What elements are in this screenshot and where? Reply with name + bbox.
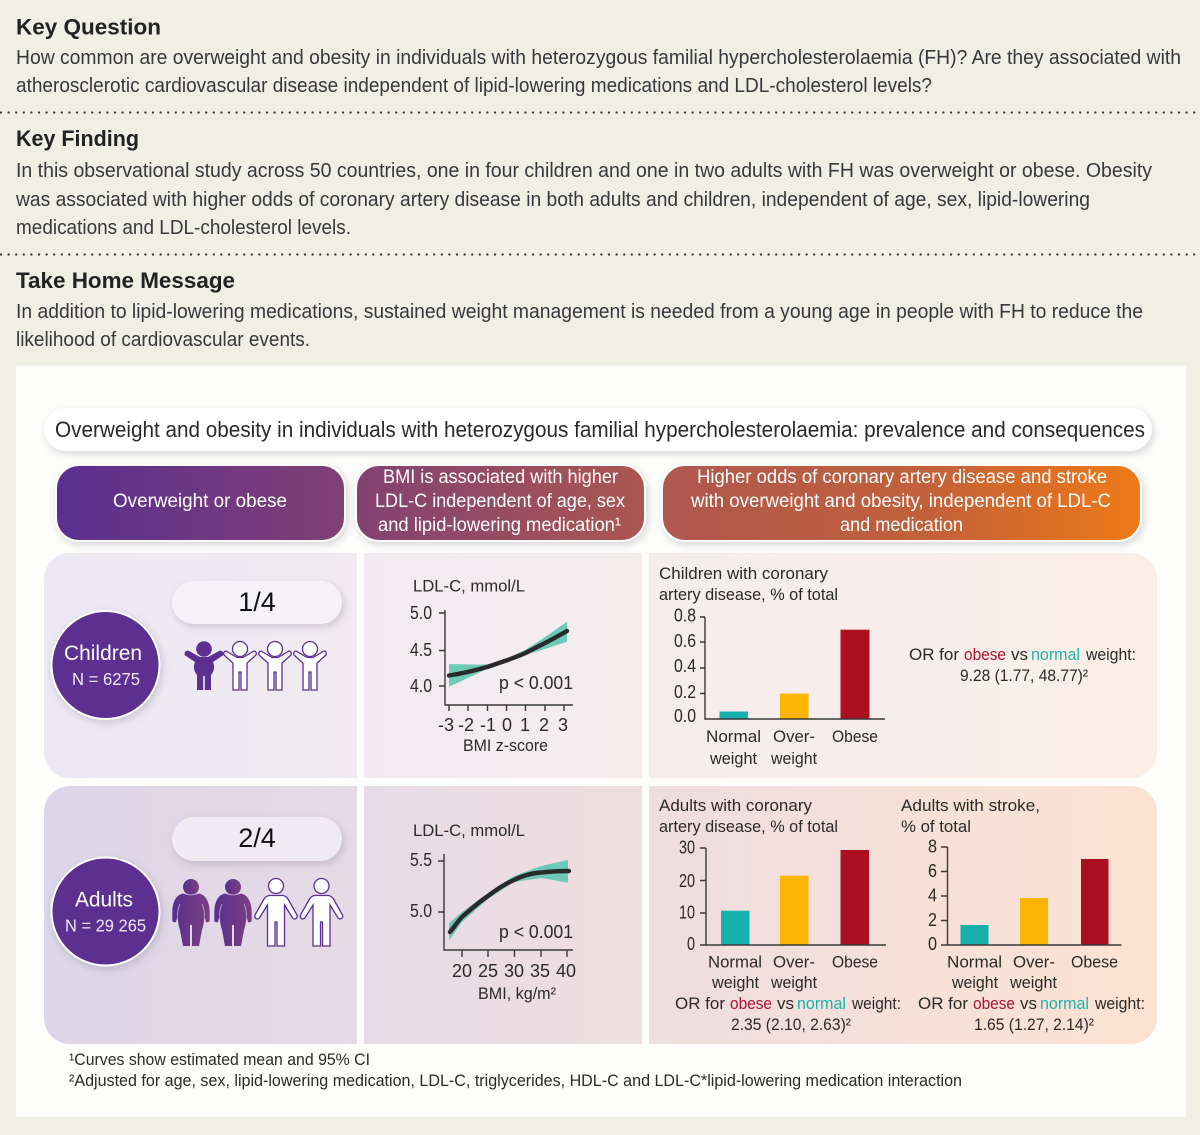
category labels: Normal [947, 952, 1002, 972]
odds ratio: adults coronary artery disease [675, 994, 901, 1034]
category labels [706, 727, 878, 768]
axes [439, 610, 573, 711]
x axis labels: -2 [458, 715, 474, 735]
y axis labels [928, 836, 937, 954]
icon: normal weight child 3 [294, 642, 326, 690]
column header: overweight or obese [56, 465, 345, 541]
icon: normal weight adult 1 [255, 878, 297, 946]
y axis labels: 8 [928, 836, 937, 856]
y axis labels: 10 [679, 902, 695, 922]
odds ratio: adults stroke: normal [1040, 994, 1089, 1013]
x axis title: BMI, kg/m² [478, 984, 556, 1003]
section: key finding [15, 126, 1152, 239]
x axis labels: 30 [504, 961, 524, 981]
chart title [901, 796, 1040, 836]
x axis labels [438, 715, 568, 735]
x axis labels: 1 [520, 715, 530, 735]
column header: BMI and LDL-C [356, 465, 645, 541]
y axis labels: 0.4 [674, 656, 696, 676]
children fraction pill: 1/4 [238, 587, 276, 617]
x axis labels: 2 [539, 715, 549, 735]
category labels: Over- [1013, 952, 1055, 972]
y axis labels: 20 [679, 871, 695, 891]
x axis title: BMI z-score [463, 736, 548, 755]
y axis labels: 5.5 [410, 850, 432, 870]
y axis labels: 0 [687, 934, 695, 954]
y axis labels: 0.6 [674, 631, 696, 651]
y axis labels: 4.5 [410, 640, 432, 660]
category labels: weight [770, 973, 817, 992]
y axis labels: 5.0 [410, 603, 432, 623]
odds ratio: children: 9.28 (1.77, 48.77)² [960, 666, 1088, 685]
category labels: Over- [773, 952, 815, 972]
y axis labels: 4.0 [410, 676, 432, 696]
p value: p < 0.001 [499, 922, 573, 942]
x axis labels: 35 [530, 961, 550, 981]
y axis labels [410, 603, 432, 696]
category labels: Normal [706, 727, 761, 746]
odds ratio: adults coronary artery disease: 2.35 (2.10, 2.63)² [731, 1015, 851, 1034]
icon: normal weight adult 2 [300, 878, 343, 946]
category labels: weight [770, 749, 817, 768]
column header: BMI and LDL-C: and lipid-lowering medication¹ [378, 514, 621, 536]
icon: obese adult 2 [214, 879, 252, 946]
category labels: Obese [832, 952, 878, 972]
confidence band [449, 860, 568, 941]
heading: take home message: Take Home Message [16, 268, 235, 293]
y axis labels [674, 606, 696, 726]
chart title: LDL-C, mmol/L [413, 576, 525, 596]
chart title: Children with coronary [659, 564, 828, 583]
column header: BMI and LDL-C: LDL-C independent of age, sex [375, 490, 625, 512]
icon: overweight child [184, 641, 224, 690]
odds ratio: adults stroke: weight: [1094, 994, 1145, 1013]
axes [941, 847, 1122, 945]
axes [438, 854, 573, 957]
column header: coronary artery disease and stroke: with overweight and obesity, independent of LDL-C [690, 490, 1111, 512]
y axis labels: 0.8 [674, 606, 696, 626]
bars [720, 630, 870, 719]
text: key finding line 2: was associated with higher odds of coronary artery disease in both adults and children, independent of age, sex, lipid-lowering [15, 189, 1090, 211]
text: key finding line 3: medications and LDL-cholesterol levels. [16, 217, 351, 239]
title pill [44, 408, 1152, 451]
text: take home line 2: likelihood of cardiovascular events. [16, 329, 310, 351]
x axis labels: 20 [452, 961, 472, 981]
panel: children coronary artery disease chart [649, 553, 1157, 778]
section: key question [16, 14, 1181, 97]
category labels: weight [709, 749, 757, 768]
icon: obese adult 1 [172, 879, 210, 946]
y axis labels: 30 [679, 838, 695, 858]
odds ratio: adults stroke: 1.65 (1.27, 2.14)² [974, 1015, 1094, 1034]
category labels: Obese [1071, 952, 1118, 972]
category labels: Normal [708, 952, 762, 972]
title pill: Overweight and obesity in individuals with heterozygous familial hypercholesterolaemia: prevalence and consequences [55, 417, 1145, 442]
text: key question line 1: How common are overweight and obesity in individuals with heterozygous familial hypercholesterolaemia (FH)? Are they associated with [16, 47, 1181, 69]
x axis labels: 0 [502, 715, 512, 735]
column header: coronary artery disease and stroke [662, 465, 1141, 541]
y axis labels: 0 [928, 934, 937, 954]
section: take home message [16, 268, 1143, 351]
children circle: Children [64, 642, 142, 665]
x axis labels [452, 961, 576, 981]
children fraction pill [172, 581, 342, 624]
text: take home line 1: In addition to lipid-lowering medications, sustained weight management is needed from a young age in people with FH to reduce the [16, 301, 1143, 323]
p value: p < 0.001 [499, 673, 573, 693]
category labels [947, 952, 1118, 992]
chart title: LDL-C, mmol/L [413, 821, 525, 840]
axes [700, 848, 886, 945]
category labels: weight [951, 973, 998, 992]
odds ratio: adults stroke [918, 994, 1145, 1034]
column header: overweight or obese: Overweight or obese [113, 490, 287, 512]
chart title: % of total [901, 817, 971, 836]
odds ratio: adults stroke: OR for [918, 994, 968, 1013]
chart title: artery disease, % of total [659, 817, 838, 836]
panel: adults LDL-C chart [364, 786, 642, 1044]
y axis labels: 0.2 [674, 682, 696, 702]
footnotes: ²Adjusted for age, sex, lipid-lowering medication, LDL-C, triglycerides, HDL-C and LDL-C*lipid-lowering medication interaction [69, 1071, 962, 1090]
adults circle: Adults [75, 888, 133, 912]
odds ratio: children: weight: [1085, 645, 1136, 664]
fitted curve [449, 631, 567, 676]
panel: children prevalence [44, 553, 357, 778]
adults circle [52, 858, 160, 966]
x axis labels: 40 [556, 961, 576, 981]
chart title: Adults with stroke, [901, 796, 1040, 815]
children circle [52, 611, 160, 719]
icon: normal weight child 1 [224, 642, 256, 690]
odds ratio: adults stroke: obese [973, 994, 1015, 1013]
column header: coronary artery disease and stroke: and medication [840, 514, 963, 536]
x axis labels: -3 [438, 715, 454, 735]
odds ratio: children: vs [1011, 645, 1028, 664]
chart title [659, 796, 838, 836]
y axis labels: 5.0 [410, 901, 432, 921]
odds ratio: adults coronary artery disease: obese [730, 994, 772, 1013]
bars [960, 859, 1108, 945]
fitted curve [450, 871, 569, 932]
y axis labels [410, 850, 432, 921]
y axis labels [679, 838, 695, 954]
panel: adults prevalence [44, 786, 357, 1044]
odds ratio: children: normal [1031, 645, 1080, 664]
axes [700, 617, 885, 719]
text: key finding line 1: In this observational study across 50 countries, one in four children and one in two adults with FH was overweight or obese. Obesity [16, 160, 1152, 182]
chart: adults stroke [901, 796, 1145, 1034]
category labels [708, 952, 878, 992]
heading: key finding: Key Finding [16, 126, 139, 151]
bars [721, 850, 869, 945]
x axis labels: 25 [478, 961, 498, 981]
odds ratio: children: OR for [909, 645, 959, 664]
panel: adults outcomes [649, 786, 1157, 1044]
x axis labels: -1 [480, 715, 496, 735]
odds ratio: adults stroke: vs [1020, 994, 1037, 1013]
category labels: Obese [832, 727, 878, 746]
odds ratio: adults coronary artery disease: vs [777, 994, 794, 1013]
column header: BMI and LDL-C: BMI is associated with higher [383, 466, 618, 488]
confidence band [449, 622, 567, 687]
children circle: N = 6275 [72, 669, 140, 689]
panel: children LDL-C chart [364, 553, 642, 778]
chart title: artery disease, % of total [659, 585, 838, 604]
odds ratio: children [909, 645, 1136, 685]
category labels: Over- [773, 727, 815, 746]
odds ratio: adults coronary artery disease: OR for [675, 994, 725, 1013]
y axis labels: 6 [928, 861, 937, 881]
odds ratio: adults coronary artery disease: weight: [851, 994, 901, 1013]
category labels: weight [1009, 973, 1057, 992]
odds ratio: children: obese [964, 645, 1006, 664]
y axis labels: 0.0 [674, 706, 696, 726]
text: key question line 2: atherosclerotic cardiovascular disease independent of lipid-lowering medications and LDL-cholesterol levels? [16, 75, 932, 97]
y axis labels: 2 [928, 910, 937, 930]
x axis labels: 3 [558, 715, 568, 735]
chart title [659, 564, 838, 604]
adults fraction pill [172, 817, 342, 861]
adults fraction pill: 2/4 [238, 823, 276, 853]
chart: adults coronary artery disease [659, 796, 901, 1034]
chart title: Adults with coronary [659, 796, 812, 815]
panel: graphical abstract [16, 366, 1186, 1117]
icon: normal weight child 2 [259, 642, 291, 690]
category labels: weight [711, 973, 759, 992]
odds ratio: adults coronary artery disease: normal [797, 994, 846, 1013]
heading: key question: Key Question [16, 14, 161, 40]
adults circle: N = 29 265 [65, 916, 146, 936]
footnotes [69, 1050, 962, 1090]
column header: coronary artery disease and stroke: Higher odds of coronary artery disease and stroke [697, 466, 1107, 488]
y axis labels: 4 [928, 886, 937, 906]
footnotes: ¹Curves show estimated mean and 95% CI [69, 1050, 370, 1069]
